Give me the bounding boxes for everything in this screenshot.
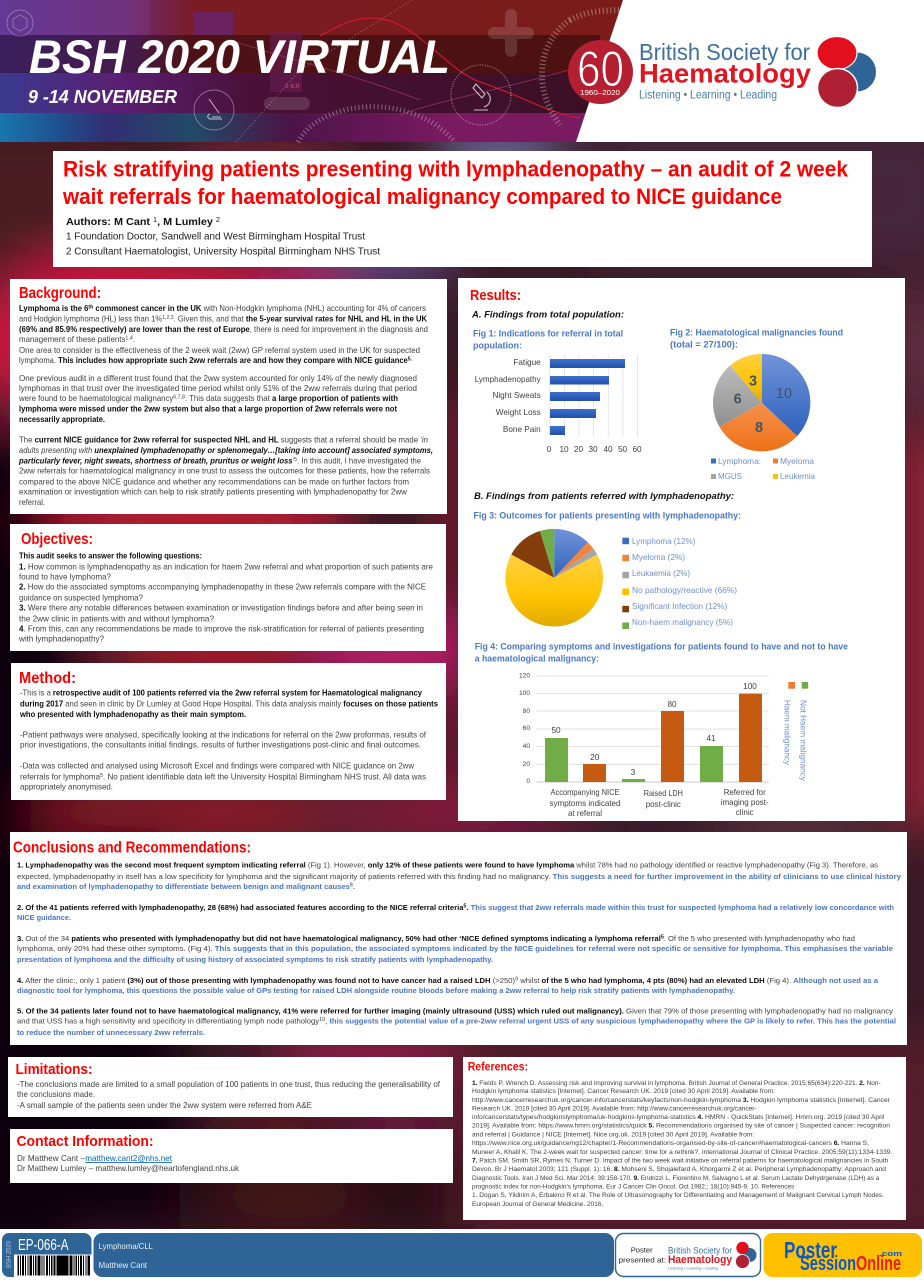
text: method body: -This is a retrospective audit of 100 patients referred via the 2ww referral system for Haematological malignancy <box>20 688 422 698</box>
chart: fig 4 comparing symptoms and investigations: 40 <box>523 743 530 750</box>
chart: fig 4 comparing symptoms and investigations: clinic <box>736 808 754 817</box>
text: background body: 5 <box>294 457 297 463</box>
text: background body: management of these patients <box>19 335 129 344</box>
text: reference list: Hodgkin lymphoma statistics [Internet]. Cancer Research UK. 2019 [cited 30 April 2019]. Available from: <box>472 1088 775 1095</box>
text: conclusions 5: to reduce the number of unnecessary 2ww referrals. <box>17 1029 205 1037</box>
text: conclusions 1: expected, lymphadenopathy in itself has a low specificity for lymphoma and the significant majority of patients referred with this finding had no malignancy. This suggests a need for further improvement in the ability of clinicians to use clinical history <box>17 873 901 881</box>
text: background body: Lymphoma is the 6 <box>19 304 89 313</box>
text: background body: and Hodgkin lymphoma (HL) less than 1% <box>19 314 172 324</box>
legend: fig 4 <box>782 682 808 782</box>
text: limitations body: the conclusions made. <box>17 1090 95 1099</box>
text: conclusions 2: This suggest that 2ww referrals made within this trust for suspected lymphoma had a relatively low concordance with <box>471 904 894 912</box>
text: contact details: Dr Matthew Cant – <box>17 1154 85 1163</box>
text: background body: (69% and 85.9% respectively) are lower than the rest of Europe, there is need for improvement in the diagnosis and <box>19 325 428 334</box>
legend: fig 3: Lymphoma (12%) <box>632 537 696 546</box>
text: method body: 5 <box>100 773 103 779</box>
legend: fig 3: Non-haem malignancy (5%) <box>632 618 733 627</box>
chart: fig 4 comparing symptoms and investigations: Accompanying NICE <box>550 788 620 797</box>
decoration: plus sign <box>488 9 534 57</box>
text: reference list: Devon. Br J Haematol 2003; 121 (Suppl. 1): 16. 8. Mohseni S, Shojaiefard A, Khorgarmi Z et al. Peripheral Lymphadenopathy: Approach and <box>472 1166 886 1173</box>
chart: fig 1 indications for referral: Night Sweats <box>492 391 541 400</box>
text: conclusions 1: . <box>353 883 355 891</box>
logo wordmark: Listening • Learning • Leading <box>639 90 777 102</box>
authors and affiliations: 2 Consultant Haematologist, University Hospital Birmingham NHS Trust <box>66 246 380 258</box>
panel: results <box>458 278 905 821</box>
chart: fig 4 comparing symptoms and investigations: post-clinic <box>646 800 681 809</box>
text: conclusions 2: 2. Of the 41 patients referred with lymphadenopathy, 28 (68%) had associated features according to the NICE referral criteria <box>17 904 463 912</box>
heading: limitations: Limitations: <box>16 1061 92 1078</box>
chart: fig 4 comparing symptoms and investigations: 100 <box>519 690 530 697</box>
text: method body: . No patient identifiable data left the University Hospital Birmingham NHS trust. All data was <box>103 772 426 782</box>
chart: fig 4 comparing symptoms and investigations: Referred for <box>724 788 766 797</box>
footer: topic and author bar: Lymphoma/CLL <box>99 1241 153 1251</box>
text: reference list: 7. Patch SM, Smith SR, Rymes N, Turner D. Impact of the two week wait initiative on referral patterns for haematological malignancies in South <box>472 1158 889 1165</box>
chart: fig 2 haematological malignancies: 10 <box>776 386 792 402</box>
legend: fig 3: Significant Infection (12%) <box>632 602 728 611</box>
text: objectives list: with lymphadenopathy? <box>18 634 104 644</box>
decoration: dashed rings <box>451 65 511 125</box>
text: background body: . <box>133 335 135 344</box>
legend: fig 2: Myeloma <box>780 457 814 466</box>
chart: fig 4 comparing symptoms and investigations: at referral <box>568 809 602 818</box>
heading: poster title: Risk stratifying patients presenting with lymphadenopathy – an audit of 2 week <box>63 156 849 182</box>
text: background body <box>18 304 433 507</box>
text: background body: One area to consider is the effectiveness of the 2 week wait (2ww) GP referral system used in the UK for suspected <box>19 346 420 355</box>
chart: fig 4 comparing symptoms and investigations: 100 <box>743 682 757 691</box>
chart: fig 1 indications for referral: Weight Loss <box>496 408 541 417</box>
heading: fig 2: Fig 2: Haematological malignancies found <box>670 326 843 338</box>
text: background body: 5. <box>408 356 412 362</box>
text: objectives list: 2. How do the associated symptoms accompanying lymphadenopathy in these 2ww referrals compare with the NICE <box>19 582 427 592</box>
panel: background <box>10 279 447 514</box>
text: background body: commonest cancer in the UK <box>93 304 202 313</box>
text: conclusions 5 <box>17 1008 896 1037</box>
heading: fig 4 <box>475 640 848 664</box>
text: conclusions 3: 3. Out of the 34 patients who presented with lymphadenopathy but did not have haematological malignancy, 50% had other ‘NICE defined symptoms indicating a lymphoma referral <box>17 935 623 943</box>
chart: fig 4 comparing symptoms and investigations: 3 <box>631 768 636 777</box>
authors and affiliations: 1 Foundation Doctor, Sandwell and West Birmingham Hospital Trust <box>66 232 365 242</box>
text: background body: referral. <box>19 498 45 507</box>
text: objectives list: found to have lymphoma? <box>19 572 111 582</box>
heading: references: References: <box>468 1062 528 1074</box>
text: reference list: Research UK. 2019 [cited 30 April 2019]. Available from: http://www.cancerresearchuk.org/cancer- <box>472 1106 757 1113</box>
text: background body: the 5-year survival rates for NHL and HL in the UK <box>246 314 427 324</box>
footer: poster presented at logo: presented at: <box>619 1256 666 1264</box>
text: conclusions 1: 1. Lymphadenopathy was the second most frequent symptom indicating referral (Fig 1). However, only 12% of these patients were found to have lymphoma whilst 78% had no pathology identified or reactive lymphadenopathy (Fig 3). Therefore, as <box>17 862 878 870</box>
text: method body: appropriately anonymised. <box>20 782 113 792</box>
text: contact details: Dr Matthew Lumley – matthew.lumley@heartofengland.nhs.uk <box>17 1164 240 1173</box>
text: conclusions 5: this suggests the potential value of a pre-2ww referral urgent USS of any suspicious lymphadenopathy where the GP is likely to refer. This has the potential <box>329 1018 896 1026</box>
text: conclusions 1: 8 <box>350 882 353 888</box>
text: conclusions 2: NICE guidance. <box>17 914 71 922</box>
heading: poster title: wait referrals for haematological malignancy compared to NICE guidance <box>62 184 782 209</box>
footer: poster presented at logo <box>616 1234 760 1276</box>
heading: fig 2 <box>670 326 843 350</box>
footer: poster id with barcode: EP-066-A <box>18 1237 69 1254</box>
authors and affiliations <box>66 217 380 258</box>
chart: fig 2 haematological malignancies: 6 <box>734 392 742 408</box>
text: conclusions 4: of the 5 who had lymphoma, 4 pts (80%) had an elevated LDH (Fig 4). Although not used as a <box>542 977 872 985</box>
text: conclusions 4: diagnostic tool for lymphoma, this questions the possible value of GPs testing for raised LDH alongside routine bloods before making a 2ww referral to help risk stratify patients with lymphadenopathy. <box>17 987 735 995</box>
text: background body: . In this audit, I have investigated the <box>297 456 421 466</box>
text: conclusions 2: 5 <box>463 904 467 910</box>
text: conclusions 4: whilst <box>518 977 542 985</box>
chart: fig 4 comparing symptoms and investigations: 50 <box>551 726 561 735</box>
text: background body: 1,4 <box>125 336 133 342</box>
authors and affiliations: , M Lumley <box>157 217 216 228</box>
legend: fig 2: MGUS <box>718 472 743 481</box>
heading: background: Background: <box>19 285 101 302</box>
text: reference list: http://www.cancerresearchuk.org/cancer-info/cancerstats/keyfacts/non-hodgkin-lymphoma 3. Hodgkin lymphoma statistics [Internet]. Cancer <box>472 1097 891 1104</box>
icon: 60 years badge: 60 <box>577 41 624 97</box>
text: reference list: prognostic index for non-Hodgkin’s lymphoma. Eur J Cancer Clin Oncol. Oct 1982;; 18(10):945-9. 10. References <box>472 1184 795 1191</box>
footer: poster session online logo: Poster <box>784 1237 837 1263</box>
icon: three overlapping circles <box>817 36 876 108</box>
chart: fig 1 indications for referral: 10 <box>559 445 569 454</box>
legend: fig 3 <box>622 537 737 629</box>
text: method body: during 2017 and seen in clinic by Dr Lumley at Good Hope Hospital. This data analysis mainly focuses on those patients <box>20 700 438 708</box>
text: conclusions 5: , <box>325 1018 329 1026</box>
heading: contact information: Contact Information: <box>16 1133 154 1150</box>
text: background body: a large proportion of patients with <box>272 394 398 403</box>
text: reference list: info/cancerstats/types/hodgkinslymphoma/uk-hodgkins-lymphoma-statistics 4. HMRN - QuickStats [Internet]. Hmrn.org. 2019 [cited 30 April <box>472 1114 885 1121</box>
text: background body: adults presenting with unexplained lymphadenopathy or splenomegaly…[taking into account] associated symptoms, <box>19 446 433 455</box>
text: limitations body <box>17 1080 441 1110</box>
logo wordmark: Haematology <box>639 58 811 88</box>
footer: poster session online logo: .com <box>879 1251 902 1258</box>
text: conclusions 3: presentation of lymphoma and the difficulty of using history of associated symptoms to risk stratify patients with lymphadenopathy. <box>17 956 493 964</box>
text: background body: lymphoma were missed under the 2ww system but also that a large proportion of 2ww referrals were not <box>19 404 397 414</box>
conference dates: 9 -14 NOVEMBER <box>28 87 177 107</box>
chart: fig 1 indications for referral <box>473 328 642 454</box>
chart: fig 2 haematological malignancies: 3 <box>749 374 757 390</box>
chart: fig 1 indications for referral: 30 <box>588 445 598 454</box>
chart: fig 2 haematological malignancies: 8 <box>755 420 763 436</box>
subheading: findings from total population: A. Findings from total population: <box>471 310 624 320</box>
legend: fig 3: Myeloma (2%) <box>632 553 685 562</box>
chart: fig 4 comparing symptoms and investigations: Raised LDH <box>644 789 683 798</box>
text: reference list: 1. Dogan S, Yildirim A, Erbakirci R et al. The Role of Ultrasonography for Differentiating and Management of Malignant Cervical Lymph Nodes. <box>472 1192 884 1199</box>
text: reference list: 2019]. Available from: https://www.hmrn.org/statistics/quick 5. Recommendations organised by site of cancer | Suspected cancer: recognition <box>472 1123 890 1130</box>
text: background body: lymphomas in that trust over the investigated time period whilst only 51% of the 2ww referrals during that period <box>19 384 417 393</box>
text: background body: were found to be haematological malignancy <box>19 394 181 403</box>
barcode <box>18 1256 91 1276</box>
legend: fig 2: Lymphoma: <box>718 457 761 466</box>
decoration: small readout: 0 8.0 <box>285 83 300 90</box>
legend: fig 4: Not Haem malignancy <box>798 700 808 782</box>
chart: fig 1 indications for referral: 0 <box>547 445 552 454</box>
footer: poster presented at logo: British Society for <box>668 1246 732 1256</box>
chart: fig 1 indications for referral: Lymphadenopathy <box>475 375 542 384</box>
text: conclusions 5: 10 <box>319 1017 325 1023</box>
text: background body: lymphoma. This includes how appropriate such 2ww referrals are and how they compare with NICE guidance <box>19 356 437 365</box>
footer: poster session online logo <box>764 1233 922 1277</box>
chart: fig 4 comparing symptoms and investigations: 20 <box>523 761 530 768</box>
text: objectives list: 1. How common is lymphadenopathy as an indication for haem 2ww referral and what proportion of such patients are <box>19 562 433 572</box>
text: reference list: https://www.nice.org.uk/guidance/ng12/chapter/1-Recommendations-organised-by-site-of-cancer#haematological-cancers 6. Hanna S, <box>472 1140 869 1147</box>
text: reference list <box>472 1080 892 1208</box>
text: limitations body: -The conclusions made are limited to a small population of 100 patients in one trust, thus reducing the generalisability of <box>17 1080 441 1089</box>
decoration: microscope icon <box>473 84 490 110</box>
header banner <box>0 0 924 142</box>
decoration: top-left hexagon icon <box>7 10 33 36</box>
legend: fig 3: No pathology/reactive (66%) <box>632 586 737 595</box>
panel: method <box>11 663 446 800</box>
panel: references <box>463 1057 906 1220</box>
text: conclusions 3 <box>17 934 893 964</box>
subheading: findings from lymphadenopathy patients: B. Findings from patients referred with lymphadenopathy: <box>474 491 734 502</box>
chart: fig 4 comparing symptoms and investigations: 80 <box>667 700 677 709</box>
heading: fig 2: (total = 27/100): <box>670 338 738 350</box>
text: background body: particularly fever, night sweats, shortness of breath, pruritus or weight loss’ <box>19 456 312 466</box>
text: background body: 2ww referrals for haematological malignancy in one trust to assess the outcomes for these patients, how the referrals <box>19 466 430 476</box>
text: background body: . This data suggests that <box>185 394 272 403</box>
chart: fig 2 haematological malignancies <box>670 326 843 481</box>
authors and affiliations: Authors: M Cant <box>66 217 153 228</box>
text: method body: prior investigations, the consultants initial findings, results of further investigations post-clinic and final outcomes. <box>20 740 421 750</box>
heading: conclusions: Conclusions and Recommendations: <box>13 840 251 857</box>
chart: fig 4 comparing symptoms and investigations: symptoms indicated <box>550 799 621 808</box>
chart: fig 1 indications for referral: Fatigue <box>513 358 541 367</box>
text: limitations body: -A small sample of the patients seen under the 2ww system were referred from A&E <box>17 1101 313 1110</box>
legend: fig 3: Leukaemia (2%) <box>632 569 690 578</box>
text: conclusions 4: 9 <box>515 977 518 983</box>
heading: fig 1 <box>473 328 623 350</box>
footer: poster session online logo: Session <box>800 1253 856 1275</box>
text: conclusions 1 <box>17 862 901 891</box>
panel: poster title <box>53 151 872 267</box>
text: conclusions 4 <box>17 977 878 995</box>
panel: objectives <box>10 524 446 651</box>
heading: results: Results: <box>470 287 521 304</box>
text: conclusions 3: . Of the 5 who presented with lymphadenopathy who had <box>664 935 855 943</box>
text: background body: th <box>88 304 94 310</box>
text: method body <box>19 688 438 792</box>
footer: poster session online logo: Online <box>856 1253 901 1275</box>
footer: topic and author bar <box>94 1233 614 1277</box>
footer: poster presented at logo: Listening • Learning • Leading <box>668 1266 718 1270</box>
text: background body: examination or investigation which can help to risk stratify patients presenting with lymphadenopathy for 2ww <box>19 488 407 496</box>
text: conclusions 5: 5. Of the 34 patients later found not to have haematological malignancy, 41% were referred for further imaging (mainly ultrasound (USS) which ruled out malignancy). Given that 79% of those presenting with lymphadenopathy had no malignancy <box>17 1008 893 1016</box>
text: contact details: matthew.cant2@nhs.net <box>85 1154 173 1163</box>
text: conclusions 4: 4. After the clinic:, only 1 patient (3%) out of those presenting with lymphadenopathy was found not to have cancer had a raised LDH (>250) <box>17 977 513 985</box>
chart: fig 1 indications for referral: Bone Pain <box>503 425 541 434</box>
logo: British Society for Haematology <box>568 36 876 108</box>
chart: fig 4 comparing symptoms and investigations: 0 <box>526 778 530 785</box>
footer: poster id with barcode: BSH 2020 <box>6 1241 12 1268</box>
text: conclusions 5: and that USS has a high sensitivity and specificity in differentiating lymph node pathology <box>17 1018 296 1026</box>
text: reference list: 1. Fields P, Wrench D. Assessing risk and improving survival in lymphoma. British Journal of General Practice. 2015;65(634):220-221. 2. Non- <box>472 1080 881 1087</box>
text: reference list: and referral | Guidance | NICE [Internet]. Nice.org.uk. 2019 [cited 30 April 2019]. Available from: <box>472 1132 754 1139</box>
text: reference list: Diagnostic Tools. Iran J Med Sci. Mar 2014; 39:158-170. 9. Endrizzi L, Fiorentino M, Salvagno L et al. Serum Lactate Dehydrgenase (LDH) as a <box>472 1175 880 1182</box>
text: background body: One previous audit in a different trust found that the 2ww system accounted for only 14% of the newly diagnosed <box>19 374 417 383</box>
authors and affiliations: 1 <box>153 217 157 224</box>
text: reference list: European Journal of General Medicine. 2016. <box>472 1201 603 1208</box>
decoration: flask ring left <box>194 90 234 130</box>
authors and affiliations: 2 <box>216 217 220 224</box>
chart: fig 1 indications for referral: 50 <box>618 445 627 454</box>
chart: fig 1 indications for referral: 60 <box>632 445 642 454</box>
footer: topic and author bar: Matthew Cant <box>99 1260 148 1270</box>
text: objectives list: 3. Were there any notable differences between examination or investigation findings before and after being seen in <box>19 604 423 612</box>
footer bar <box>0 1229 924 1280</box>
decoration: red wave <box>320 18 580 118</box>
heading: fig 1: Fig 1: Indications for referral in total <box>473 328 623 338</box>
conference title <box>28 30 450 107</box>
text: background body: The current NICE guidance for 2ww referral for suspected NHL and HL suggests that a referral should be made ‘in <box>19 436 428 444</box>
heading: fig 3: Fig 3: Outcomes for patients presenting with lymphadenopathy: <box>474 510 741 520</box>
legend: fig 4: Haem malignancy <box>782 700 792 766</box>
text: conclusions 1: and examination of lymphadenopathy to differentiate between benign and malignant causes <box>17 883 327 891</box>
footer: poster presented at logo: Haematology <box>668 1254 733 1266</box>
text: objectives list: 4. From this, can any recommendations be made to improve the risk-stratification for referral of patients presenting <box>19 624 424 634</box>
decoration: pill shape <box>264 97 310 110</box>
text: conclusions 2 <box>17 904 894 922</box>
text: contact details <box>17 1154 240 1173</box>
text: background body: 1,2,3 <box>162 315 174 321</box>
text: background body: with Non-Hodgkin lymphoma (NHL) accounting for 4% of cancers <box>204 304 440 313</box>
text: method body: -Data was collected and analysed using Microsoft Excel and findings were compared with NICE guidance on 2ww <box>20 762 414 770</box>
logo panel background <box>576 0 924 142</box>
icon: 60 years badge: 1960–2020 <box>580 88 620 97</box>
heading: objectives: Objectives: <box>21 531 93 548</box>
text: objectives list <box>18 552 433 644</box>
heading: fig 4: Fig 4: Comparing symptoms and investigations for patients found to have and not to have <box>475 640 848 652</box>
text: objectives list: guidance on suspected lymphoma? <box>19 594 143 602</box>
chart: fig 1 indications for referral: 40 <box>603 445 613 454</box>
conference title: BSH 2020 VIRTUAL <box>29 30 450 83</box>
text: method body: referrals for lymphoma <box>20 772 102 782</box>
heading: fig 4: a haematological malignancy: <box>475 652 599 664</box>
text: conclusions 3: 5 <box>661 934 664 940</box>
text: reference list: Muneer A, Khalil K. The 2-week wait for suspected cancer: time for a rethink?. International Journal of Clinical Practice. 2005;59(11):1334-1339. <box>472 1149 892 1156</box>
logo wordmark: British Society for <box>639 39 810 65</box>
heading: poster title <box>62 156 849 209</box>
panel: limitations <box>8 1057 453 1117</box>
heading: method: Method: <box>19 670 76 687</box>
panel: conclusions and recommendations <box>10 832 907 1045</box>
text: background body: necessarily appropriate. <box>19 415 105 424</box>
chart: fig 4 comparing symptoms and investigations: 80 <box>523 708 530 715</box>
text: background body: 6,7,8 <box>173 394 185 400</box>
chart: fig 4 comparing symptoms and investigations: 20 <box>590 753 600 762</box>
chart: fig 4 comparing symptoms and investigations: 120 <box>519 673 530 680</box>
chart: fig 4 comparing symptoms and investigations: 60 <box>523 725 530 732</box>
text: conclusions 3: lymphoma, only 20% had these other symptoms. (Fig 4). This suggests that in this population, the associated symptoms indicated by the NICE guidelines for referral were not specific or sensitive for lymphoma. This emphasises the variable <box>17 945 893 953</box>
chart: fig 3 outcomes <box>474 510 741 629</box>
text: background body: . Given this, and that <box>174 314 246 324</box>
text: objectives list: the 2ww clinic in patients with and without lymphoma? <box>19 614 214 624</box>
chart: fig 4 comparing symptoms and investigations: 41 <box>706 734 716 743</box>
footer: poster id with barcode <box>2 1233 92 1277</box>
text: method body: who presented with lymphadenopathy as their main symptom. <box>19 710 246 719</box>
logo wordmark <box>639 39 811 102</box>
chart: fig 4 comparing symptoms and investigations <box>475 640 848 818</box>
text: background body: compared to the above NICE guidance and whether any recommendations can be made on further factors from <box>19 478 409 486</box>
heading: fig 1: population: <box>473 340 522 350</box>
text: method body: -Patient pathways were analysed, specifically looking at the indications for referral on the 2ww proformas, results of <box>20 730 427 740</box>
panel: contact information <box>10 1129 453 1183</box>
chart: fig 1 indications for referral: 20 <box>574 445 583 454</box>
footer: poster presented at logo: Poster <box>631 1246 653 1254</box>
text: conclusions 2: . <box>466 904 471 912</box>
legend: fig 2: Leukemia <box>780 472 815 481</box>
text: objectives list: This audit seeks to answer the following questions: <box>19 552 202 560</box>
legend: fig 2 <box>711 457 815 481</box>
chart: fig 4 comparing symptoms and investigations: imaging post- <box>721 798 769 807</box>
